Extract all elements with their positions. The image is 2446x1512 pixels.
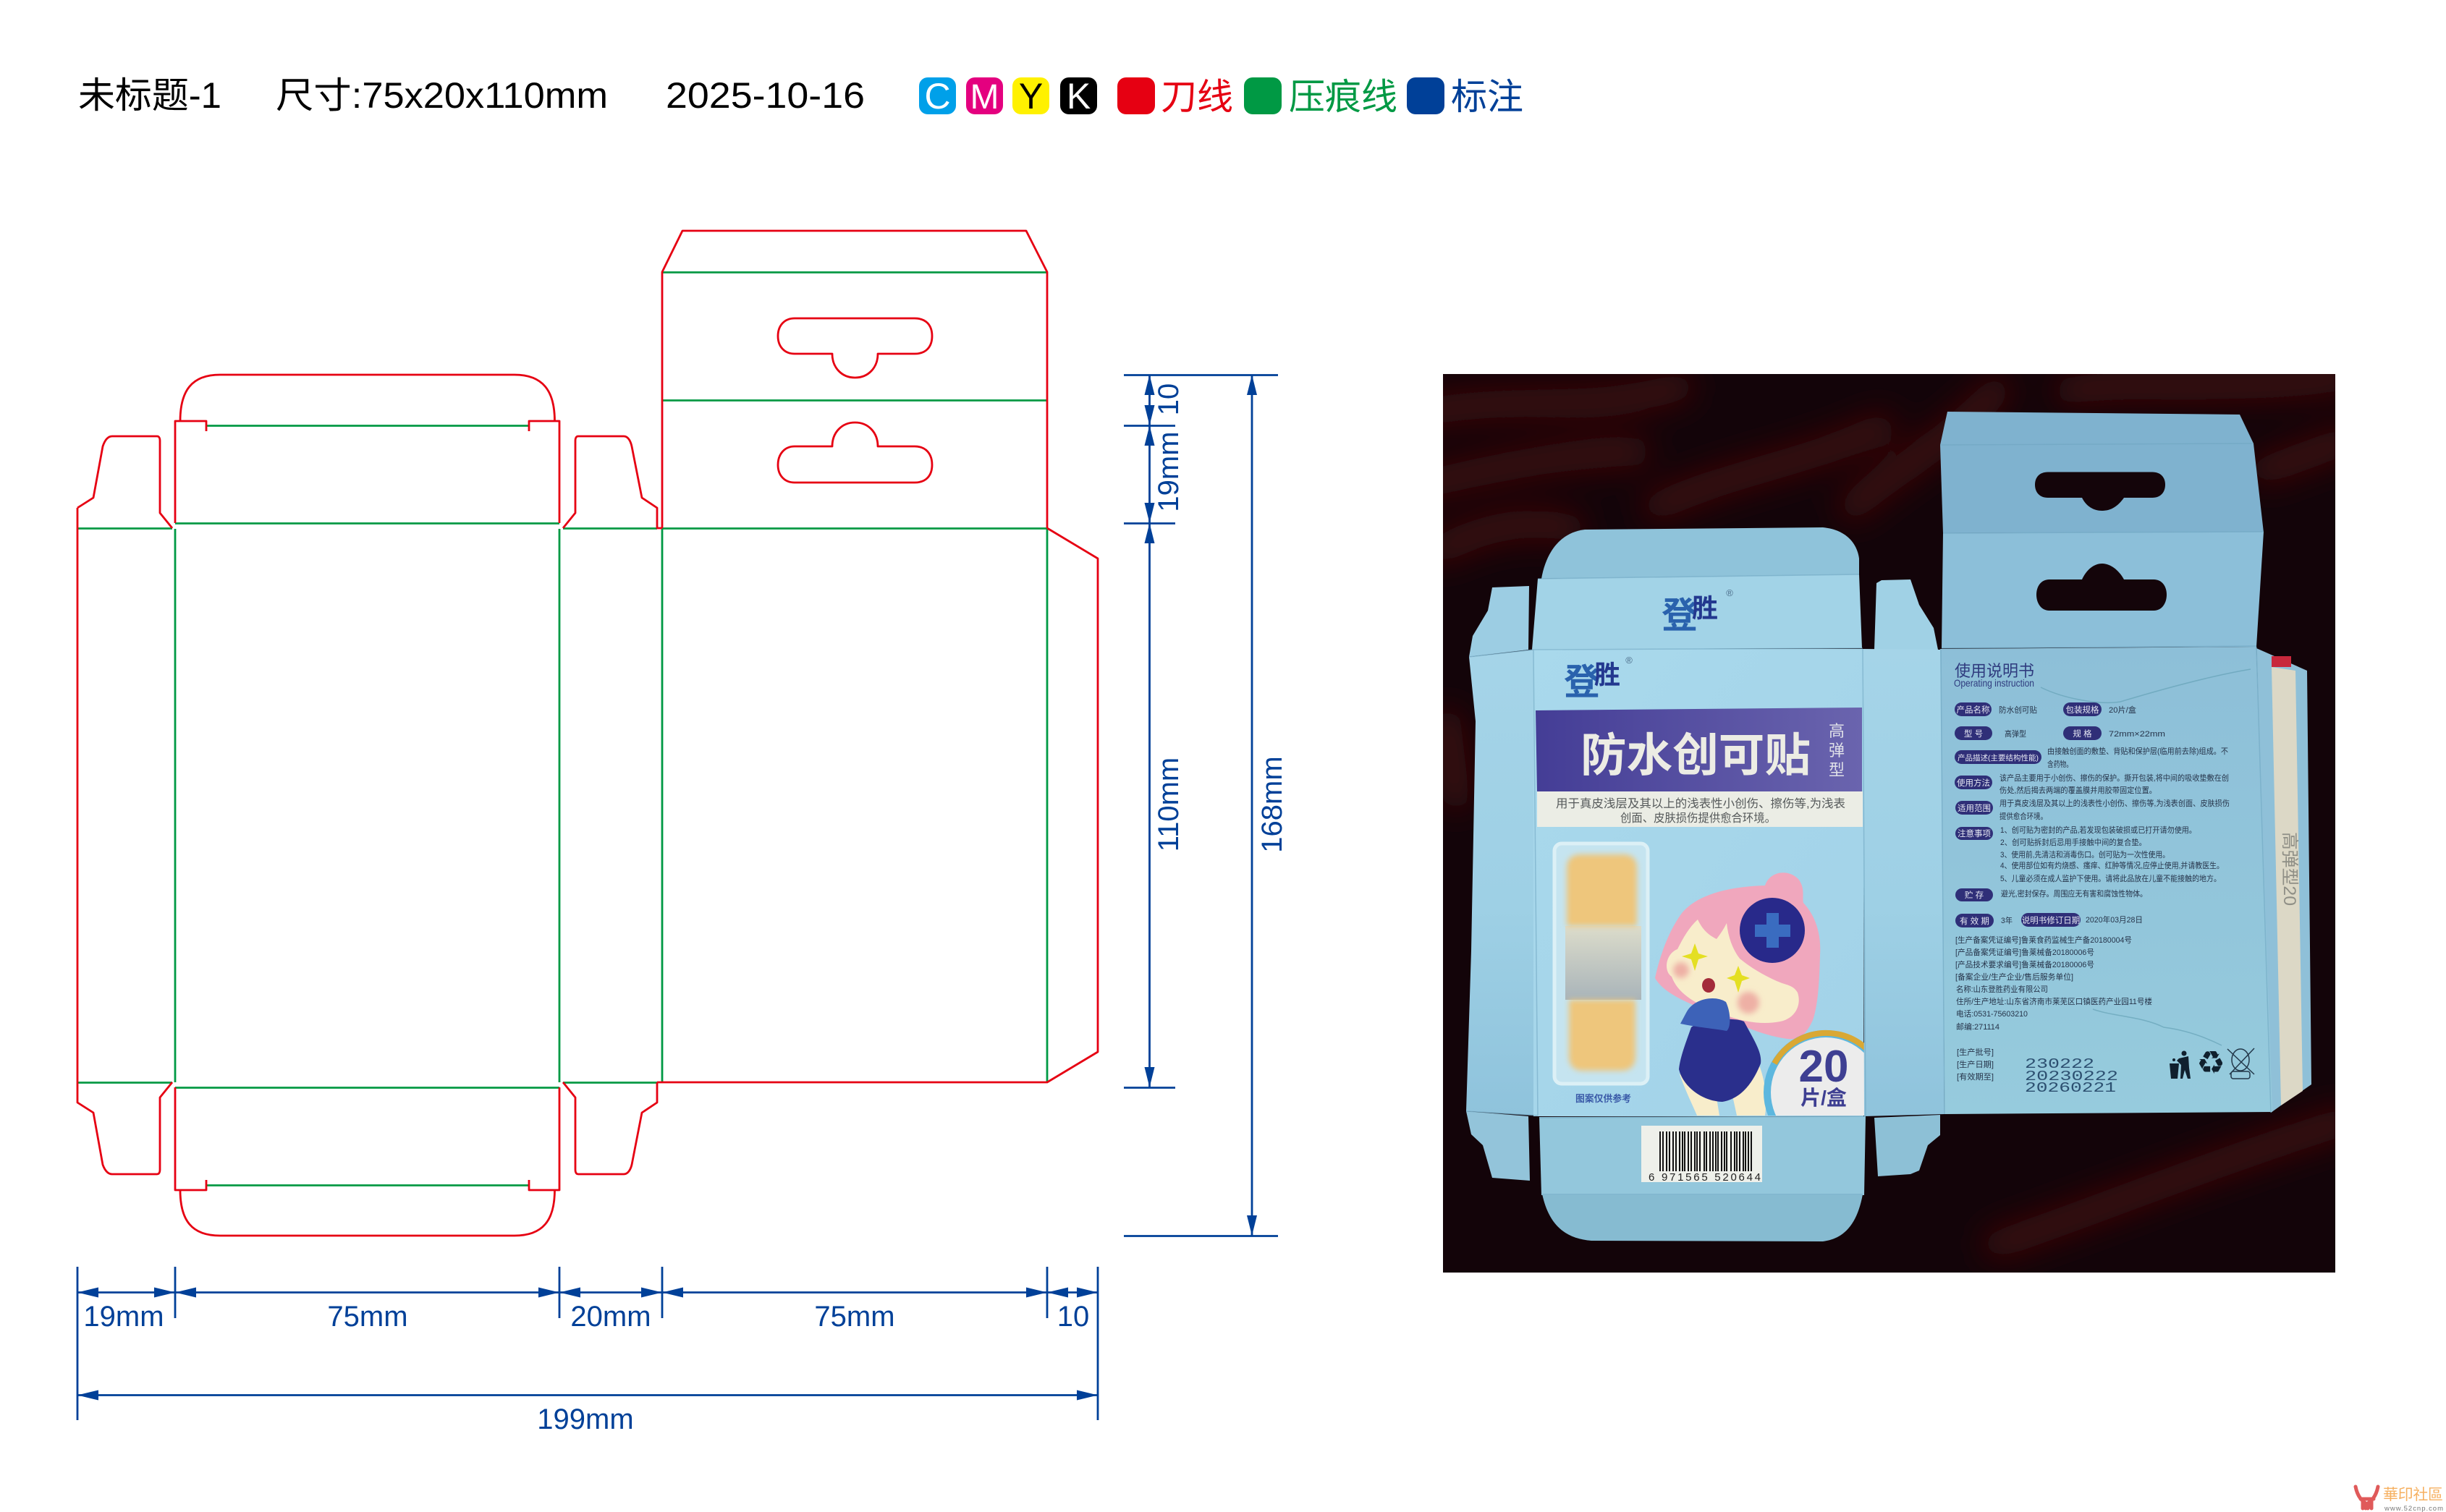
- crease lines: [77, 272, 1047, 1185]
- purple title banner: [1536, 708, 1862, 791]
- right side panel and dust flaps: [1863, 579, 1944, 1176]
- instruction body text: 由接触创面的敷垫、背贴和保护层(临用前去除)组成。不: [2047, 746, 2228, 756]
- outer left edge and left dust flaps: [77, 436, 172, 1174]
- instruction body text: 72mm×22mm: [2109, 730, 2165, 739]
- extension lines and dimension lines: [77, 1267, 1098, 1420]
- instruction body text: 2、创可贴拆封后忌用手接触中间的复合垫。: [2000, 837, 2146, 847]
- instruction body text: 5、儿童必须在成人监护下使用。请将此品放在儿童不能接触的地方。: [2000, 873, 2221, 883]
- legend: crease line: 压痕线: [1289, 77, 1397, 117]
- extension lines and dimension lines: [1124, 375, 1278, 1236]
- purple title banner: 弹: [1829, 742, 1845, 760]
- logo on front panel: [1565, 657, 1633, 697]
- purple title banner: 型: [1829, 761, 1845, 779]
- swatch K: [1060, 76, 1097, 116]
- 20 pieces count badge: 20: [1799, 1042, 1848, 1092]
- instruction body text: [产品备案凭证编号]鲁莱械备20180006号: [1955, 947, 2094, 957]
- logo on top panel: ®: [1726, 587, 1733, 598]
- instruction body text: 避光,密封保存。周围应无有害和腐蚀性物体。: [2001, 888, 2147, 899]
- watermark name: 華印社區: [2383, 1487, 2443, 1503]
- legs: [1680, 1063, 1766, 1116]
- instruction body text: 该产品主要用于小创伤、擦伤的保护。撕开包装,将中间的吸收垫敷在创: [1999, 773, 2229, 783]
- pill labels: [1955, 702, 2102, 927]
- label 10: 10: [1153, 383, 1185, 415]
- instruction body text: 伤处,然后揭去两端的覆盖膜并用胶带固定位置。: [1999, 785, 2157, 795]
- hang hole lower: [778, 422, 932, 483]
- arrowheads: [77, 1288, 1098, 1401]
- vertical dimensions: [1124, 375, 1288, 1236]
- hang holes: [2035, 472, 2165, 511]
- cheeks: [1673, 962, 1759, 1014]
- instruction body text: 住所/生产地址:山东省济南市莱芜区口镇医药产业园11号楼: [1956, 996, 2152, 1006]
- label 110mm: 110mm: [1153, 757, 1185, 851]
- front panel: [1533, 649, 1864, 1116]
- inkjet date codes: 20230222: [2025, 1069, 2118, 1084]
- swatch K: K: [1067, 76, 1091, 116]
- dark wood background: [1426, 374, 2345, 1273]
- label 19mm: 19mm: [83, 1301, 164, 1333]
- instruction body text: 3、使用前,先清洁和消毒伤口。创可贴为一次性使用。: [2000, 849, 2170, 859]
- instruction body text: 高弹型: [2005, 729, 2026, 739]
- star eyes: [1682, 943, 1708, 971]
- date: 2025-10-16: [666, 75, 865, 116]
- logo on front panel: 胜: [1594, 660, 1620, 689]
- right dust flaps: [563, 436, 662, 1174]
- pill text: 说明书修订日期: [2022, 915, 2080, 925]
- inkjet date codes: 20260221: [2025, 1080, 2116, 1096]
- bottom panel and tuck flap: [1539, 1116, 1866, 1241]
- pill text: 产品描述(主要结构性能): [1958, 753, 2039, 763]
- white description strip: 用于真皮浅层及其以上的浅表性小创伤、擦伤等,为浅表: [1556, 797, 1845, 810]
- logo on top panel: [1662, 590, 1733, 631]
- label 75mm: 75mm: [327, 1301, 408, 1333]
- raised hands: [1680, 998, 1730, 1031]
- instruction body text: [备案企业/生产企业/售后服务单位]: [1955, 972, 2073, 982]
- glue tab and bottom edge: [657, 528, 1098, 1082]
- watermark logo: [2356, 1487, 2378, 1508]
- logo on front panel: 登: [1564, 662, 1600, 702]
- instruction body text: [产品技术要求编号]鲁莱械备20180006号: [1955, 959, 2094, 969]
- icon: no littering: [2170, 1050, 2191, 1079]
- watermark: [2356, 1487, 2443, 1512]
- label 199mm: 199mm: [537, 1403, 634, 1435]
- hair: [1655, 872, 1820, 1039]
- label 10: 10: [1057, 1301, 1089, 1333]
- box size: 尺寸:75x20x110mm: [276, 75, 608, 116]
- bandage illustration: 图案仅供参考: [1575, 1093, 1631, 1104]
- swatch Y: [1012, 76, 1049, 116]
- pill text: 适用范围: [1958, 803, 1991, 813]
- white description strip: 创面、皮肤损伤提供愈合环境。: [1620, 811, 1776, 825]
- instruction body text: 邮编:271114: [1956, 1022, 1999, 1032]
- pill text: [1957, 705, 2099, 926]
- instruction body text: 提供愈合环境。: [1999, 811, 2047, 821]
- instruction body text: [1955, 705, 2230, 1082]
- purple title banner: 防水创可贴: [1580, 730, 1811, 781]
- barcode: [1641, 1126, 1762, 1184]
- instruction body text: 2020年03月28日: [2086, 914, 2143, 925]
- swatch M: M: [970, 78, 999, 116]
- pill text: 注意事项: [1958, 828, 1991, 838]
- instruction body text: 20片/盒: [2109, 705, 2136, 715]
- face: [1667, 919, 1799, 1023]
- legend: annotation: 标注: [1451, 77, 1523, 117]
- glue tab with back edge: [2256, 648, 2311, 1113]
- header bar: [78, 75, 1523, 117]
- left dust flaps and side panel: [1466, 586, 1538, 1181]
- instruction body text: 防水创可贴: [1999, 705, 2037, 715]
- pill text: 包装规格: [2065, 705, 2099, 715]
- legend: cut line: 刀线: [1161, 77, 1233, 117]
- bandage illustration: [1554, 844, 1648, 1104]
- legend: annotation: [1407, 77, 1523, 117]
- instruction body text: 名称:山东登胜药业有限公司: [1956, 984, 2048, 994]
- white description strip: [1537, 791, 1863, 827]
- instruction body text: 用于真皮浅层及其以上的浅表性小创伤、擦伤等,为浅表创面、皮肤损伤: [1999, 798, 2230, 808]
- legend: cut line: [1117, 77, 1233, 117]
- swatch C: C: [924, 76, 951, 116]
- hang tab outline: [662, 231, 1047, 528]
- label 20mm: 20mm: [570, 1301, 651, 1333]
- cartoon girl character: [1655, 872, 1820, 1116]
- arrowheads: [1145, 375, 1257, 1236]
- pill text: 贮 存: [1965, 890, 1984, 900]
- back panel: operating instructions: [1940, 647, 2272, 1114]
- instructions heading: 使用说明书: [1955, 662, 2034, 680]
- logo on top panel: 胜: [1692, 593, 1718, 623]
- pill text: 有 效 期: [1960, 916, 1989, 926]
- instruction body text: 电话:0531-75603210: [1956, 1009, 2028, 1019]
- instruction body text: [有效期至]: [1957, 1071, 1994, 1082]
- hang tab panels: [1940, 412, 2264, 648]
- inkjet date codes: [2025, 1056, 2118, 1096]
- pill text: 型 号: [1964, 729, 1983, 739]
- purple title banner: 高: [1829, 722, 1845, 740]
- box die-line: [77, 231, 1098, 1236]
- file title: 未标题-1: [78, 75, 221, 116]
- glue tab with back edge: 高弹型20: [2280, 832, 2299, 906]
- photo: unfolded bandage box: [1426, 374, 2345, 1273]
- 20 pieces count badge: 片/盒: [1800, 1087, 1847, 1109]
- icon: do not microwave: [2227, 1048, 2254, 1079]
- label 19mm: 19mm: [1153, 431, 1185, 512]
- pill text: 使用方法: [1957, 778, 1990, 788]
- instruction body text: [生产日期]: [1957, 1059, 1994, 1069]
- hang hole upper: [778, 318, 932, 378]
- logo on front panel: ®: [1625, 655, 1633, 666]
- logo on top panel: 登: [1662, 595, 1698, 636]
- barcode: 6 971565 520644: [1649, 1171, 1761, 1184]
- icon: recycling: ♻: [2196, 1045, 2225, 1082]
- bottom tuck flap: [175, 1087, 559, 1236]
- instruction body text: 含药物。: [2047, 759, 2073, 769]
- instruction body text: [生产批号]: [1957, 1047, 1994, 1057]
- instruction body text: [生产备案凭证编号]鲁莱食药监械生产备20180004号: [1955, 935, 2132, 945]
- instruction body text: 3年: [2001, 915, 2013, 925]
- swatch Y: Y: [1019, 76, 1043, 116]
- pill text: 规 格: [2073, 729, 2092, 739]
- round badge with cross on head: [1740, 898, 1805, 963]
- top tuck flap: [175, 375, 559, 523]
- horizontal dimensions: [77, 1267, 1098, 1435]
- mouth: [1702, 978, 1715, 993]
- blue body: [1679, 1019, 1761, 1102]
- inkjet date codes: 230222: [2025, 1056, 2094, 1072]
- label 75mm: 75mm: [814, 1301, 895, 1333]
- instructions subtitle: Operating instruction: [1954, 677, 2034, 689]
- instruction body text: 4、使用部位如有灼烧感、瘙痒、红肿等情况,应停止使用,并请教医生。: [2000, 860, 2224, 870]
- label 168mm: 168mm: [1256, 756, 1288, 853]
- instruction body text: 1、创可贴为密封的产品,若发现包装破损或已打开请勿使用。: [2000, 825, 2196, 835]
- top panel and tuck flap: [1532, 527, 1862, 650]
- pill text: 产品名称: [1957, 705, 1990, 715]
- cut lines: [77, 231, 1098, 1236]
- 20 pieces count badge: [1764, 1030, 1864, 1116]
